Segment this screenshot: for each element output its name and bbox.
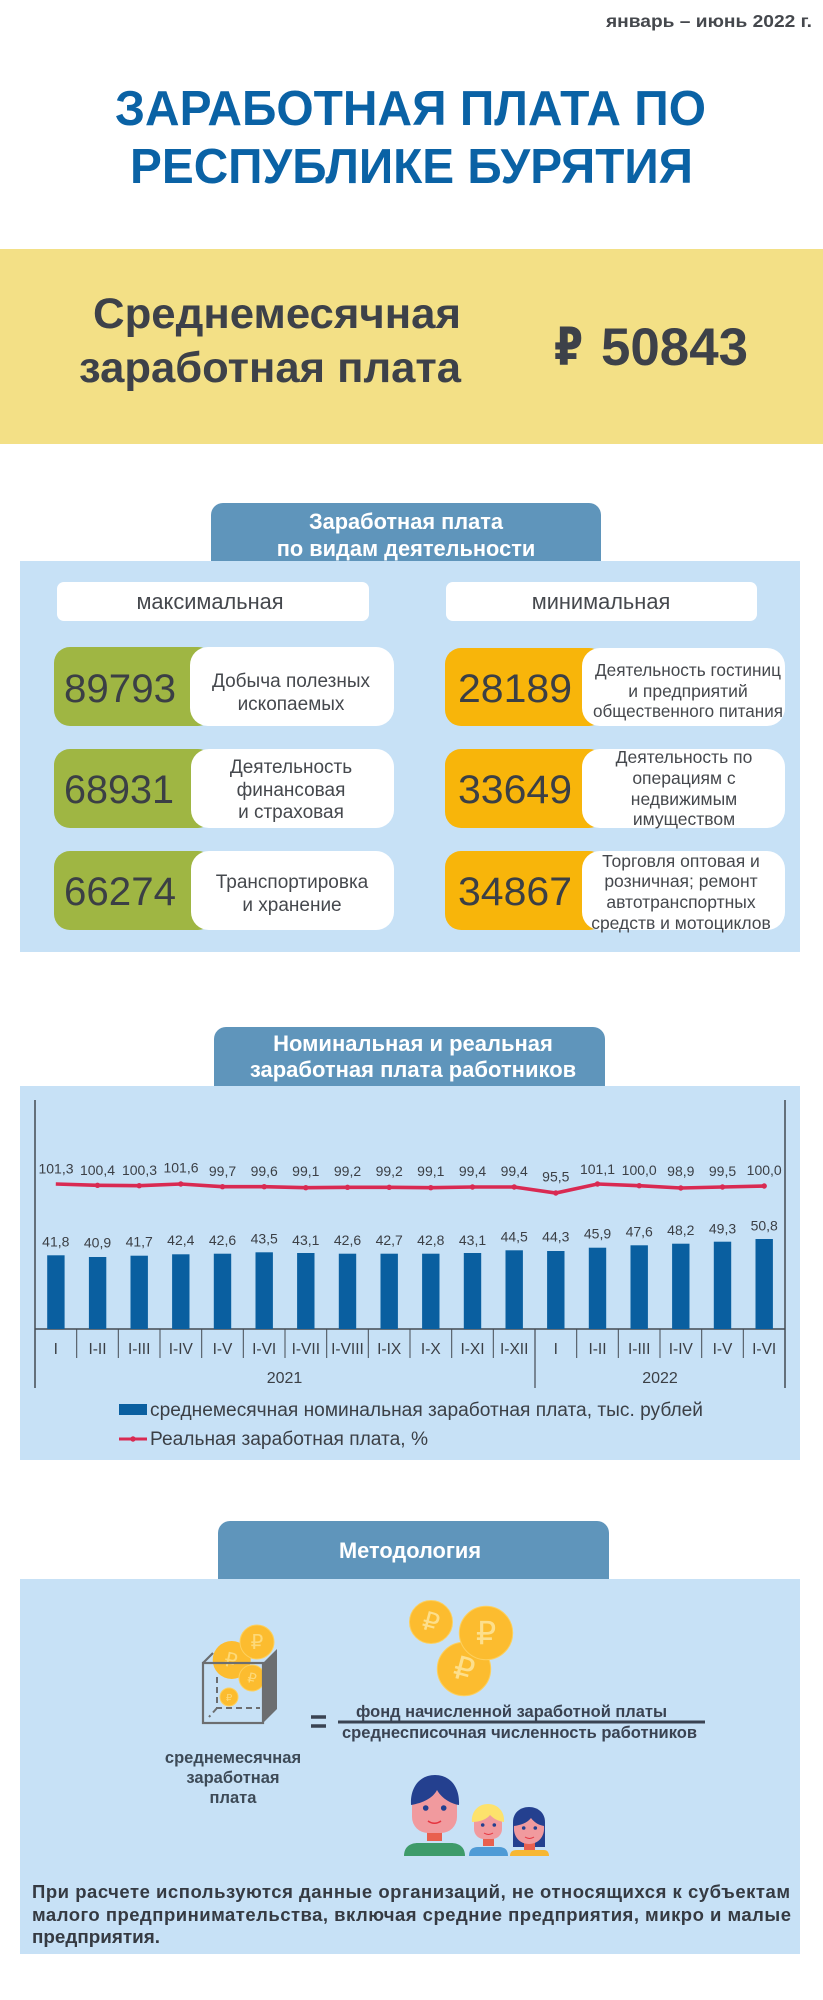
methodology note: малого предпринимательства, включая средние предприятия, микро и малые (32, 1904, 791, 1925)
category labels (54, 1341, 776, 1358)
category labels: I-V (713, 1341, 733, 1358)
category labels: I-VI (252, 1341, 276, 1358)
line value labels: 99,5 (709, 1163, 736, 1179)
icon: ruble coins: ₽ (419, 1605, 443, 1639)
bar value labels: 44,5 (501, 1229, 528, 1245)
panel tab heading: Методология (339, 1538, 481, 1563)
line value labels: 101,1 (580, 1161, 615, 1177)
category labels: I (554, 1341, 558, 1358)
card: 34867: Торговля оптовая и (602, 851, 760, 871)
chart (35, 1100, 785, 1388)
category labels: I-XI (460, 1341, 485, 1358)
banner label: заработная плата (79, 345, 461, 392)
card: 34867: розничная; ремонт (604, 871, 758, 891)
category labels: I-X (421, 1341, 441, 1358)
line value labels: 99,1 (417, 1163, 445, 1179)
line value labels: 99,6 (251, 1163, 278, 1179)
formula fraction: фонд начисленной заработной платы (356, 1702, 667, 1721)
category labels: I-XII (500, 1341, 528, 1358)
bar value labels: 42,8 (417, 1232, 445, 1248)
icon: box with coins (203, 1625, 277, 1723)
category labels: I-VIII (331, 1341, 364, 1358)
card: 28189: и предприятий (628, 681, 748, 701)
category labels: I-IX (377, 1341, 402, 1358)
line value labels: 101,6 (163, 1160, 199, 1176)
title: ЗАРАБОТНАЯ ПЛАТА ПО (115, 82, 706, 136)
year labels: 2022 (642, 1370, 678, 1387)
line value labels (38, 1160, 782, 1185)
bar value labels: 41,7 (126, 1234, 153, 1250)
bar value labels: 42,7 (376, 1232, 403, 1248)
card: 28189: 28189 (458, 667, 572, 711)
bar value labels: 42,6 (209, 1232, 236, 1248)
card: 33649 (445, 747, 785, 829)
column header: minimum (446, 582, 757, 621)
year labels (267, 1370, 678, 1387)
bar value labels: 43,1 (459, 1232, 486, 1248)
bar value labels: 41,8 (42, 1234, 70, 1250)
panel: methodology (20, 1521, 800, 1954)
methodology note (32, 1881, 791, 1947)
line value labels: 101,3 (38, 1160, 74, 1176)
banner value: 50843 (601, 318, 748, 377)
line value labels: 98,9 (667, 1163, 695, 1179)
category labels: I-II (88, 1341, 107, 1358)
icon: box with coins: ₽ (222, 1649, 240, 1673)
line value labels: 100,0 (622, 1162, 657, 1178)
category labels: I-III (628, 1341, 650, 1358)
card: 68931: финансовая (237, 780, 345, 801)
line value labels: 99,2 (376, 1163, 403, 1179)
icon: box with coins: ₽ (251, 1632, 264, 1654)
methodology note: При расчете используются данные организаций, не относящихся к субъектам (32, 1881, 790, 1902)
panel: average salary banner (0, 249, 823, 444)
card: 89793: 89793 (64, 667, 176, 711)
title (115, 82, 706, 194)
line value labels: 100,4 (80, 1162, 115, 1178)
bar value labels: 45,9 (584, 1225, 611, 1241)
column header: maximum (57, 582, 369, 621)
formula left label: плата (210, 1789, 257, 1807)
formula left label (165, 1749, 301, 1807)
category labels: I-IV (669, 1341, 694, 1358)
card: 33649: Деятельность по (616, 747, 752, 767)
category labels: I-V (213, 1341, 233, 1358)
card: 89793: Добыча полезных (212, 671, 370, 692)
card: 34867: 34867 (458, 870, 572, 914)
year labels: 2021 (267, 1370, 302, 1387)
bar value labels: 44,3 (542, 1229, 570, 1245)
methodology note: предприятия. (32, 1926, 160, 1947)
card: 68931 (54, 749, 394, 828)
banner label (79, 291, 461, 392)
icon: ruble coins (410, 1600, 513, 1696)
title: РЕСПУБЛИКЕ БУРЯТИЯ (130, 140, 693, 194)
icon: box with coins: ₽ (246, 1669, 258, 1687)
category labels: I-VII (292, 1341, 320, 1358)
banner value: ₽ (554, 318, 583, 377)
bar value labels: 47,6 (626, 1224, 653, 1240)
line value labels: 100,0 (747, 1162, 782, 1178)
category labels: I-II (588, 1341, 607, 1358)
column header: maximum: максимальная (136, 589, 284, 614)
category labels: I-III (128, 1341, 150, 1358)
card: 28189 (445, 648, 785, 726)
formula left label: заработная (186, 1769, 280, 1787)
legend: Реальная заработная плата, % (150, 1429, 428, 1450)
bar value labels: 43,1 (292, 1232, 320, 1248)
legend (119, 1400, 703, 1450)
icon: people (404, 1775, 549, 1856)
card: 68931: и страховая (238, 802, 344, 823)
icon: ruble coins: ₽ (450, 1649, 478, 1689)
card: 34867: средств и мотоциклов (591, 913, 771, 933)
card: 89793 (54, 647, 394, 726)
icon: box with coins: ₽ (226, 1693, 233, 1704)
card: 66274: Транспортировка (216, 872, 369, 893)
panel tab heading: заработная плата работников (250, 1057, 576, 1082)
panel tab heading (211, 503, 601, 561)
category labels: I-VI (752, 1341, 776, 1358)
bar value labels: 49,3 (709, 1220, 736, 1236)
category labels: I (54, 1341, 58, 1358)
panel tab heading (218, 1521, 609, 1579)
card: 66274: и хранение (242, 895, 342, 916)
panel tab heading: Заработная плата (309, 509, 504, 534)
panel: nominal and real wages (20, 1027, 800, 1460)
card: 28189: Деятельность гостиниц (595, 660, 781, 680)
line value labels: 100,3 (122, 1162, 157, 1178)
line value labels: 99,4 (459, 1163, 486, 1179)
card: 66274 (54, 851, 394, 930)
period label: январь – июнь 2022 г. (605, 11, 812, 31)
bar value labels: 43,5 (251, 1230, 278, 1246)
card: 89793: ископаемых (238, 694, 345, 715)
line value labels: 99,4 (501, 1163, 528, 1179)
category labels: I-IV (169, 1341, 194, 1358)
line value labels: 95,5 (542, 1169, 570, 1185)
card: 33649: 33649 (458, 768, 572, 812)
icon: ruble coins: ₽ (476, 1615, 496, 1651)
legend: среднемесячная номинальная заработная плата, тыс. рублей (150, 1400, 703, 1421)
panel tab heading: по видам деятельности (277, 536, 535, 561)
formula left label: среднемесячная (165, 1749, 301, 1767)
card: 66274: 66274 (64, 870, 176, 914)
chart axes (35, 1100, 785, 1388)
formula fraction: среднесписочная численность работников (342, 1723, 697, 1742)
card: 68931: 68931 (64, 768, 174, 812)
banner label: Среднемесячная (93, 291, 461, 338)
card: 34867 (445, 851, 785, 933)
bar value labels (42, 1218, 778, 1251)
panel tab heading (214, 1027, 605, 1086)
line: real wage (56, 1181, 767, 1196)
icon: equals sign (311, 1717, 326, 1726)
bar value labels: 42,6 (334, 1232, 361, 1248)
column header: minimum: минимальная (532, 589, 670, 614)
card: 33649: операциям с (632, 768, 736, 788)
bars: nominal wage (47, 1239, 773, 1329)
bar value labels: 48,2 (667, 1222, 695, 1238)
line value labels: 99,7 (209, 1163, 236, 1179)
card: 28189: общественного питания (593, 701, 783, 721)
card: 33649: недвижимым (631, 789, 737, 809)
card: 34867: автотранспортных (606, 892, 756, 912)
panel tab heading: Номинальная и реальная (273, 1031, 553, 1056)
panel: salary by activity (20, 503, 800, 952)
card: 68931: Деятельность (230, 757, 352, 778)
formula fraction (338, 1702, 705, 1742)
bar value labels: 42,4 (167, 1232, 195, 1248)
bar value labels: 40,9 (84, 1235, 111, 1251)
line value labels: 99,1 (292, 1163, 320, 1179)
line value labels: 99,2 (334, 1163, 361, 1179)
bar value labels: 50,8 (751, 1218, 778, 1234)
card: 33649: имуществом (633, 809, 735, 829)
